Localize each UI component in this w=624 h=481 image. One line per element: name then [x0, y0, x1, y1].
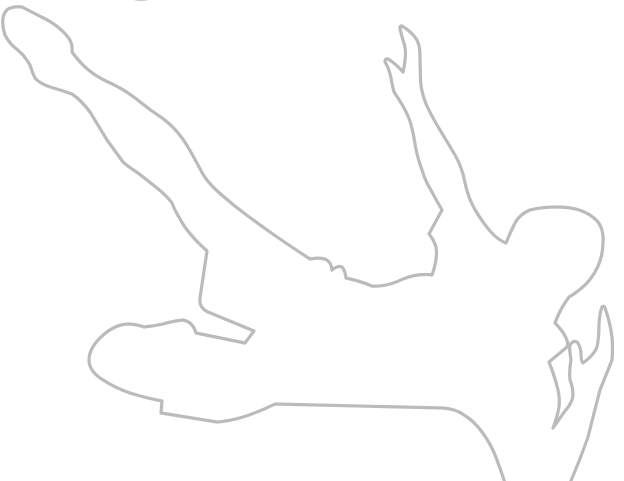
outline: lower body and supporting leg: [3, 7, 505, 481]
